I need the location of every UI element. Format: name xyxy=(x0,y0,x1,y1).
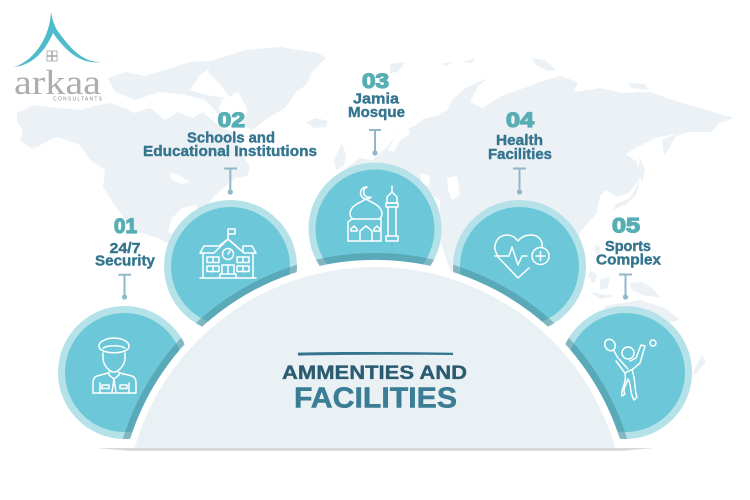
item 02: schools xyxy=(143,109,317,160)
label 02 line 2: Educational Institutions xyxy=(143,144,317,160)
connector 03 xyxy=(369,130,381,156)
icon: security officer xyxy=(93,338,136,393)
circle 5 xyxy=(565,306,692,439)
label 01 line 2: Security xyxy=(95,254,155,270)
item 01: security xyxy=(95,215,155,270)
item 04: health: 04 xyxy=(506,109,534,132)
icon: mosque xyxy=(348,186,398,241)
logo wordmark: arkaa xyxy=(14,63,102,102)
title brush line xyxy=(298,352,453,356)
item 04: health xyxy=(488,109,552,163)
item 05: sports xyxy=(596,215,661,269)
connector 04 xyxy=(513,168,526,195)
logo: arkaa consultants xyxy=(14,12,103,102)
item 02: schools: 02 xyxy=(218,109,245,132)
logo roof xyxy=(14,12,101,67)
label 05 line 2: Complex xyxy=(596,253,661,269)
label 04 line 2: Facilities xyxy=(488,147,552,163)
label 03: Jamia xyxy=(353,92,400,108)
label 01: 24/7 xyxy=(110,241,140,257)
circle 1 xyxy=(58,306,185,439)
circle 2 xyxy=(164,200,297,326)
label 05: Sports xyxy=(605,239,651,255)
icon: heart with plus xyxy=(495,235,549,278)
title line 2: FACILITIES xyxy=(294,383,457,415)
label 04: Health xyxy=(496,133,543,149)
icon: badminton player xyxy=(603,337,656,400)
connector 02 xyxy=(224,168,237,195)
title line 1: AMMENTIES AND xyxy=(282,363,467,384)
world map background xyxy=(17,47,733,377)
label 02: Schools and xyxy=(187,131,275,147)
logo window xyxy=(47,51,57,61)
white map cuts xyxy=(170,92,460,200)
title xyxy=(282,352,467,415)
item 01: security: 01 xyxy=(114,215,137,238)
label 03 line 2: Mosque xyxy=(348,105,405,121)
connector 05 xyxy=(619,274,632,300)
circle 4 xyxy=(453,200,586,326)
connector 01 xyxy=(118,275,131,300)
item 03: mosque xyxy=(348,70,405,121)
base shadow xyxy=(96,448,654,451)
item 03: mosque: 03 xyxy=(362,70,389,93)
icon: school building xyxy=(200,229,256,278)
white ring around central panel xyxy=(127,260,623,448)
circle 3 xyxy=(308,162,442,266)
item 05: sports: 05 xyxy=(612,215,640,238)
central panel xyxy=(135,267,615,448)
logo tagline: CONSULTANTS xyxy=(53,96,103,102)
